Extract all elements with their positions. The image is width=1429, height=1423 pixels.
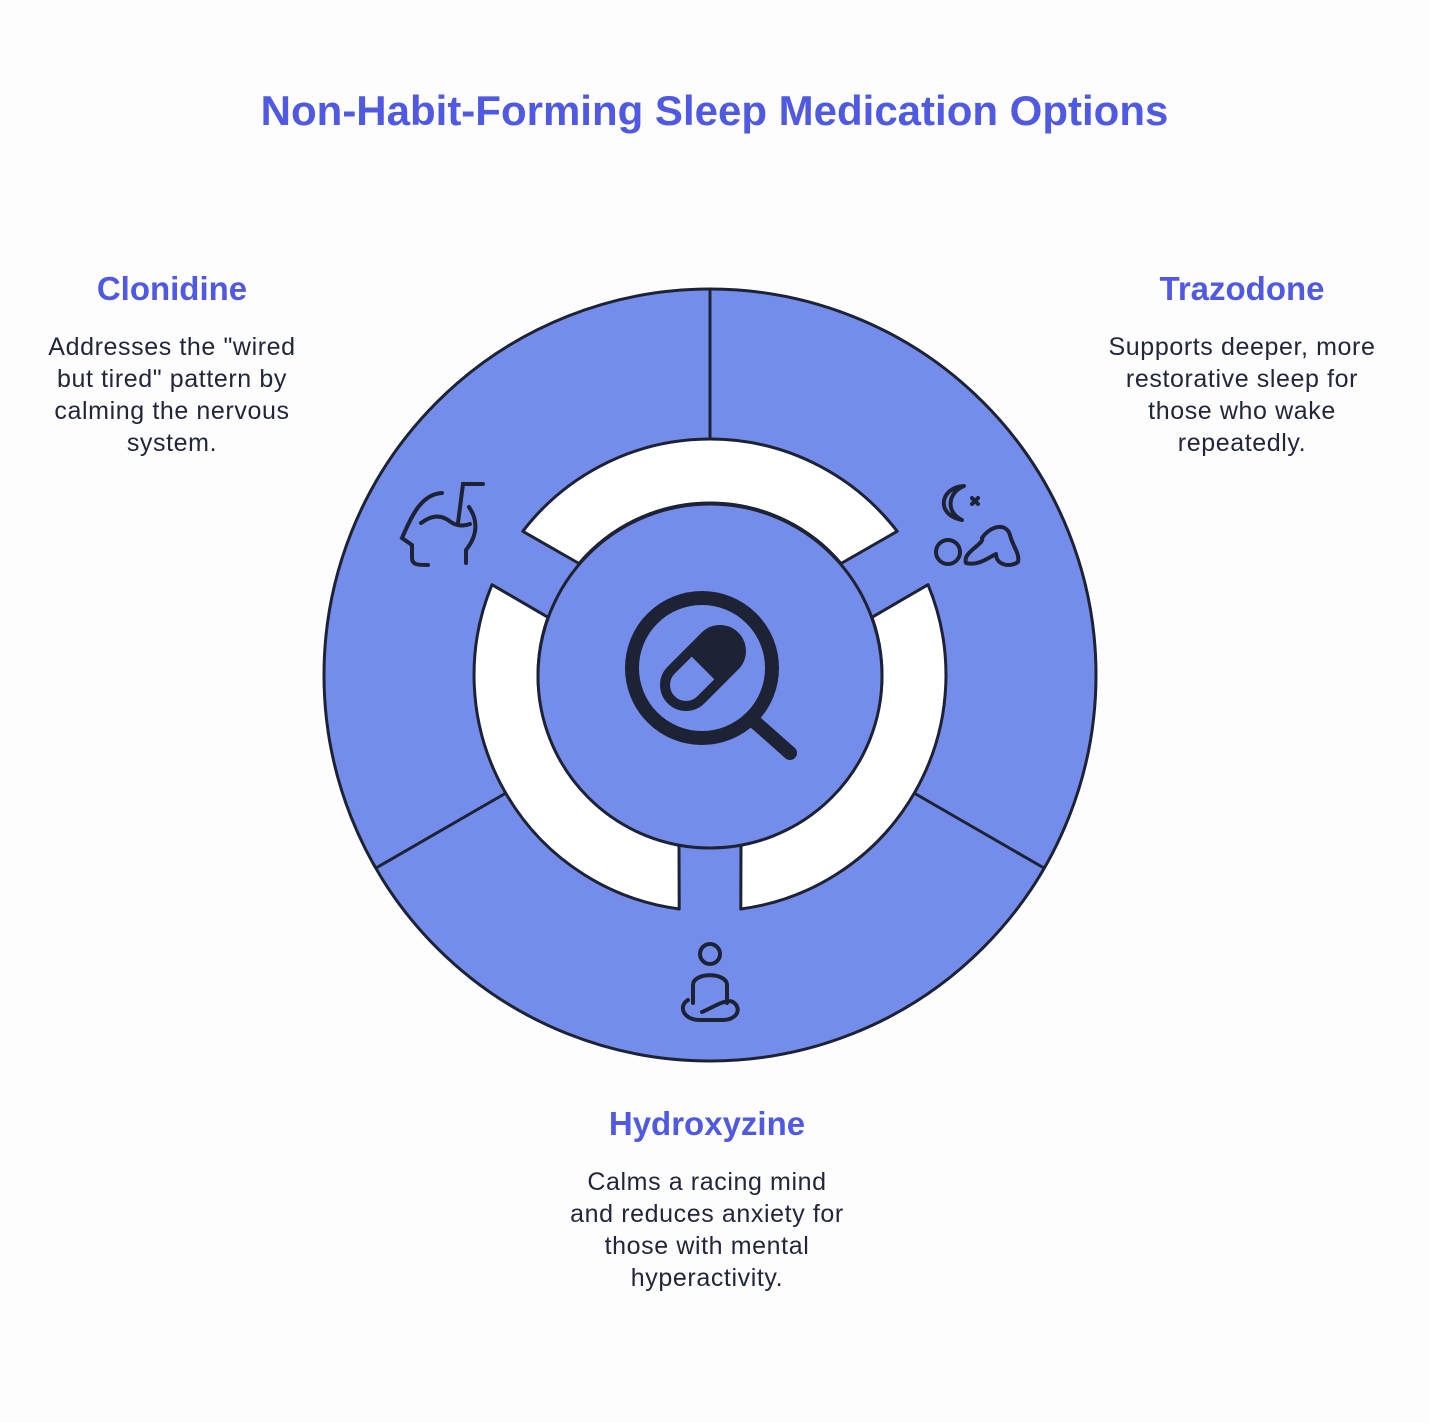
text: Clonidine: but tired" pattern by xyxy=(57,365,287,393)
text: Trazodone: Trazodone xyxy=(1159,270,1325,307)
text: Hydroxyzine: hyperactivity. xyxy=(631,1264,783,1292)
text: Clonidine: calming the nervous xyxy=(54,397,290,425)
text: Hydroxyzine: and reduces anxiety for xyxy=(570,1200,844,1228)
icon: meditating person xyxy=(683,944,738,1020)
text: Hydroxyzine: Hydroxyzine xyxy=(609,1105,805,1142)
text: Hydroxyzine xyxy=(570,1105,844,1292)
text: Trazodone xyxy=(1109,270,1375,457)
text: Hydroxyzine: Calms a racing mind xyxy=(587,1168,827,1196)
outer ring xyxy=(324,289,1096,1061)
text: Trazodone: Supports deeper, more xyxy=(1109,333,1375,361)
icon: head xyxy=(402,484,483,565)
text: Clonidine: system. xyxy=(127,429,217,457)
icon: magnifier pill xyxy=(632,598,790,753)
text: Clonidine: Clonidine xyxy=(97,270,247,307)
text: Trazodone: repeatedly. xyxy=(1178,429,1306,457)
icon: sleep moon xyxy=(936,486,1018,565)
white arcs xyxy=(474,439,946,909)
text: Hydroxyzine: those with mental xyxy=(605,1232,809,1260)
title: Non-Habit-Forming Sleep Medication Options xyxy=(261,87,1168,134)
text: Trazodone: restorative sleep for xyxy=(1126,365,1358,393)
text: Clonidine xyxy=(48,270,296,457)
text: Clonidine: Addresses the "wired xyxy=(48,333,296,361)
dividers xyxy=(376,289,1044,868)
text: Trazodone: those who wake xyxy=(1148,397,1336,425)
inner circle xyxy=(538,504,882,848)
